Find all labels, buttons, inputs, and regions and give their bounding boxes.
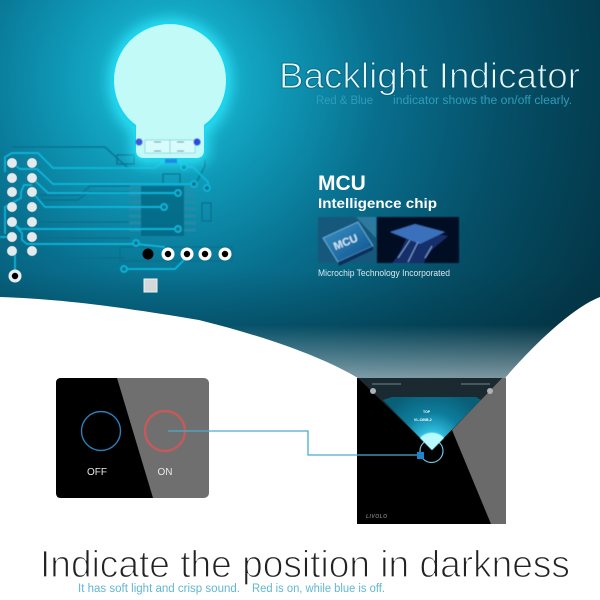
wall switch, livolo, cutaway view: [357, 378, 506, 524]
switch panel: OFF / ON: [56, 378, 209, 498]
connector line: [168, 431, 418, 455]
brand: LIVOLO: [366, 514, 387, 520]
pad grid: [7, 158, 37, 256]
glowing light bulb: [112, 22, 228, 163]
MCU heading: MCU: [318, 172, 366, 195]
heading: Backlight Indicator: Backlight Indicator: [279, 55, 580, 96]
touch circle: [420, 440, 443, 462]
OFF label: OFF: [87, 467, 107, 478]
dim background traces: [12, 147, 232, 261]
square pad: [144, 279, 157, 292]
bright traces: [0, 153, 208, 276]
through-hole pads: [8, 248, 232, 282]
chip body: [129, 186, 196, 236]
Microchip caption: Microchip Technology Incorporated: [318, 268, 450, 278]
caption: soft light and crisp sound: It has soft light and crisp sound.: [78, 583, 240, 595]
MCU chip image: MCU: [332, 232, 360, 253]
caption: soft light and crisp sound: Red is on, while blue is off.: [252, 583, 385, 595]
grey glass wedge: [452, 378, 506, 524]
connector square marker: [417, 452, 424, 459]
OFF ring: [82, 412, 120, 450]
caption: soft light and crisp sound: [78, 583, 385, 595]
dark teal background with curved bottom edge: [0, 0, 600, 380]
wall switch, livolo, cutaway view: VL-C60B-2: [414, 418, 432, 422]
MCU chip image: [318, 217, 376, 266]
subheading: indicator description: Red & Blue: [316, 95, 373, 107]
ON label: ON: [158, 467, 172, 478]
cutaway inner view: [358, 378, 502, 450]
board label: TOP: [423, 410, 431, 414]
subheading: indicator description: indicator shows the on/off clearly.: [393, 95, 572, 107]
heading: Indicate the position in darkness: Indicate the position in darkness: [40, 544, 570, 586]
ON ring: [145, 411, 185, 451]
processor image: [377, 217, 459, 263]
bright glow: [420, 433, 444, 450]
subheading: indicator description: [316, 95, 572, 107]
bulb inner components: [136, 138, 200, 163]
Intelligence chip label: Intelligence chip: [318, 195, 437, 211]
circuit board traces: [0, 147, 232, 276]
